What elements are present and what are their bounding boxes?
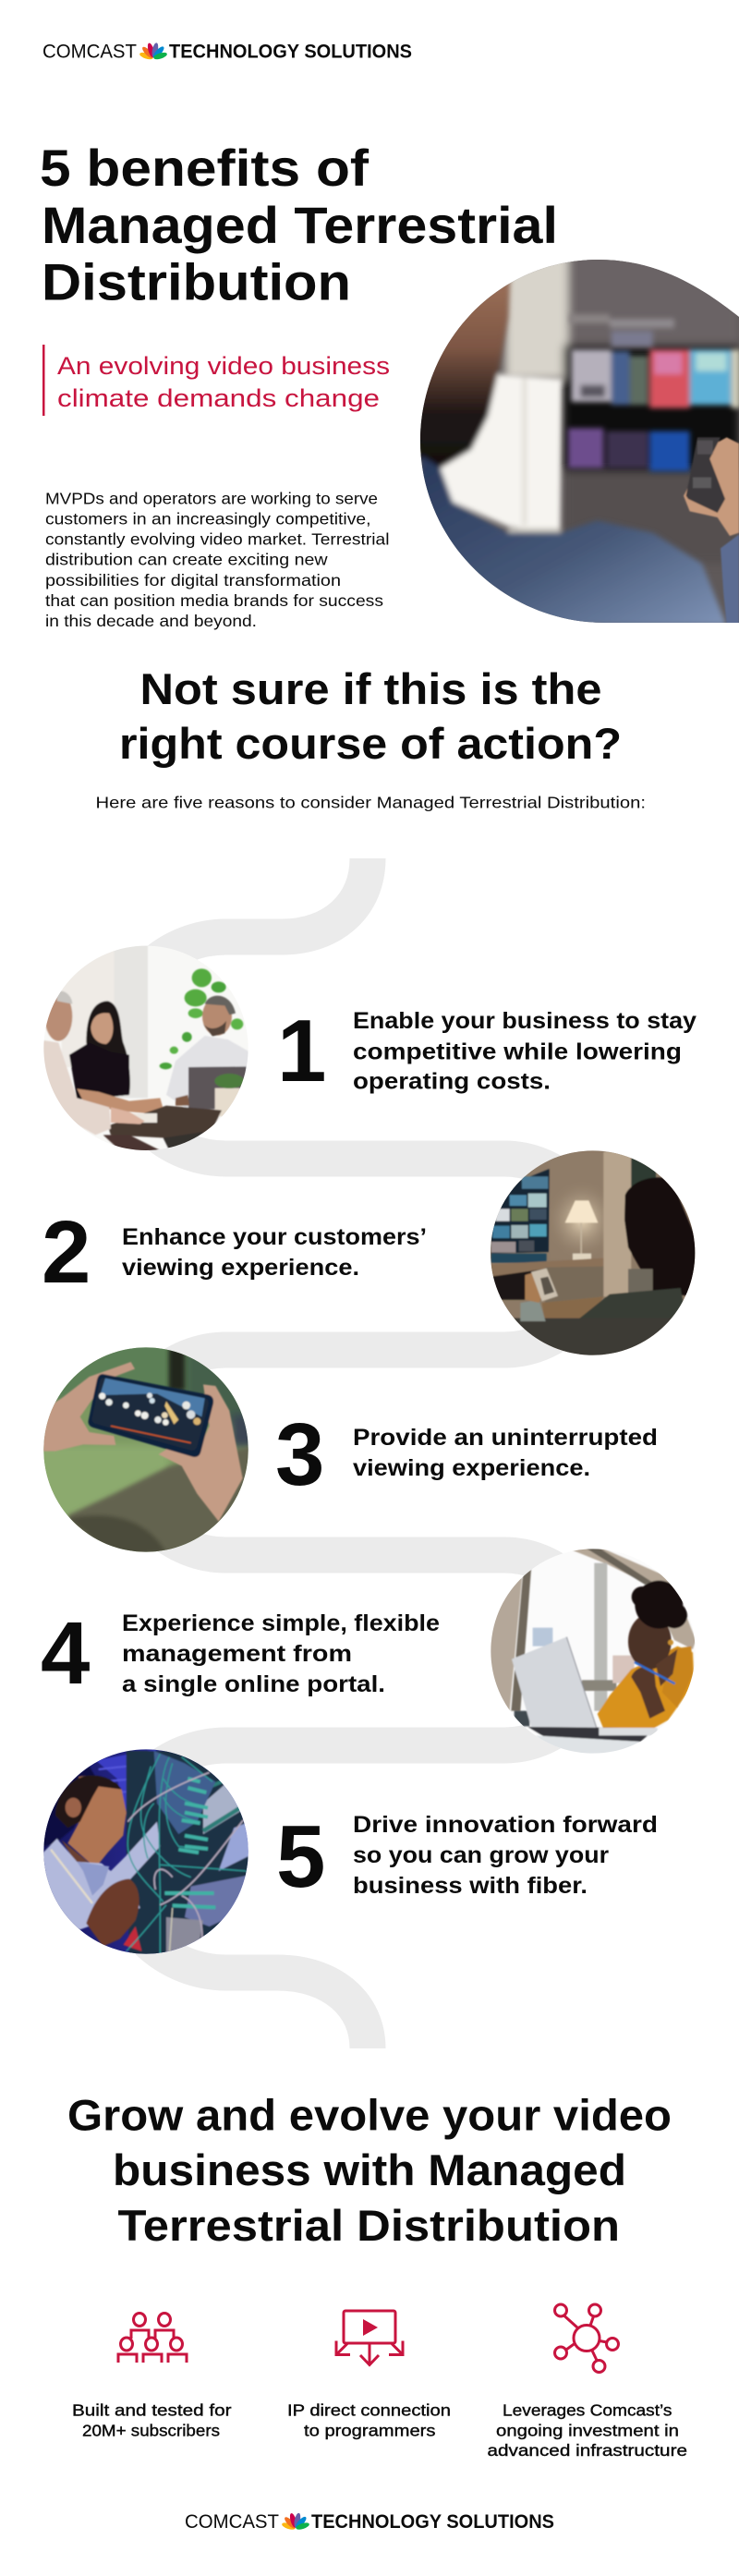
section heading: not sure: right course of action? [119,719,622,768]
closing heading [67,2090,672,2250]
caption 2: IP direct connection [287,2400,451,2419]
title: Managed Terrestrial [42,196,558,254]
caption 3 [488,2400,687,2460]
section subheading: Here are five reasons to consider Managed Terrestrial Distribution: [96,793,646,811]
benefit 1 text: competitive while lowering [353,1039,682,1064]
footer logo: Comcast Technology Solutions: TECHNOLOGY SOLUTIONS [311,2511,554,2533]
caption 3: advanced infrastructure [488,2441,687,2460]
photo 3: hands holding phone playing video [43,1347,248,1552]
caption 2 [287,2400,451,2439]
intro paragraph: in this decade and beyond. [45,612,257,630]
benefit 2 text: Enhance your customers’ [122,1224,427,1250]
photo 1: meeting around a table [43,946,248,1150]
footer logo: Comcast Technology Solutions: COMCAST [185,2511,279,2533]
hero photo: viewer with remote in front of TV [406,249,739,626]
icon: peacock [281,2512,310,2531]
benefit 4 text [122,1610,440,1697]
benefit 1 text: Enable your business to stay [353,1008,697,1034]
closing heading: Grow and evolve your video [67,2090,672,2139]
icon: subscribers group [118,2314,187,2363]
photo 4: woman looking at laptop [491,1549,695,1754]
benefit 4 text: management from [122,1641,352,1667]
number 1: 1 [277,1002,326,1100]
benefit 5 text: so you can grow your [353,1842,609,1868]
section heading: not sure: Not sure if this is the [140,664,602,713]
icon: network hub [554,2304,619,2373]
caption 3: Leverages Comcast’s [503,2400,672,2419]
intro paragraph: possibilities for digital transformation [45,571,341,589]
photo 5: technician working on network rack [43,1749,248,1954]
subtitle callout with red bar [42,345,390,416]
benefit 3 text: Provide an uninterrupted [353,1425,658,1451]
number 4: 4 [41,1604,90,1703]
caption 1 [72,2400,232,2439]
intro paragraph: customers in an increasingly competitive, [45,509,371,528]
number 3: 3 [275,1405,324,1504]
subtitle callout with red bar: An evolving video business [57,352,390,380]
title: 5 benefits of [40,139,369,197]
title [40,139,558,310]
number 5: 5 [276,1807,325,1906]
caption 2: to programmers [304,2421,436,2439]
closing heading: business with Managed [113,2145,626,2194]
benefit 2 text: viewing experience. [122,1255,359,1281]
benefit 2 text [122,1224,427,1281]
top logo: Comcast Technology Solutions: TECHNOLOGY SOLUTIONS [169,41,412,63]
benefit 1 text [353,1008,697,1094]
benefit 5 text: business with fiber. [353,1873,588,1899]
benefit 5 text: Drive innovation forward [353,1812,658,1838]
benefit 4 text: a single online portal. [122,1671,385,1697]
intro paragraph [45,490,390,630]
photo 2: person watching TV at dusk [491,1150,695,1355]
closing heading: Terrestrial Distribution [118,2201,620,2250]
winding grey path [113,858,600,2048]
benefit 3 text: viewing experience. [353,1455,590,1481]
intro paragraph: constantly evolving video market. Terrestrial [45,529,390,548]
title: Distribution [42,253,351,310]
subtitle callout with red bar: climate demands change [57,384,380,412]
intro paragraph: MVPDs and operators are working to serve [45,490,378,508]
intro paragraph: distribution can create exciting new [45,551,328,569]
benefit 1 text: operating costs. [353,1068,551,1094]
benefit 5 text [353,1812,658,1899]
caption 1: 20M+ subscribers [82,2421,220,2439]
benefit 3 text [353,1425,658,1481]
footer logo: Comcast Technology Solutions [185,2511,554,2533]
number 2: 2 [42,1203,91,1302]
top logo: Comcast Technology Solutions: COMCAST [42,41,137,63]
icon: peacock [139,43,168,61]
section heading: not sure [119,664,622,768]
intro paragraph: that can position media brands for success [45,591,383,610]
icon: video screen with arrows [336,2311,403,2365]
benefit 4 text: Experience simple, flexible [122,1610,440,1636]
caption 1: Built and tested for [72,2400,232,2419]
top logo: Comcast Technology Solutions [42,41,412,63]
caption 3: ongoing investment in [496,2421,679,2439]
